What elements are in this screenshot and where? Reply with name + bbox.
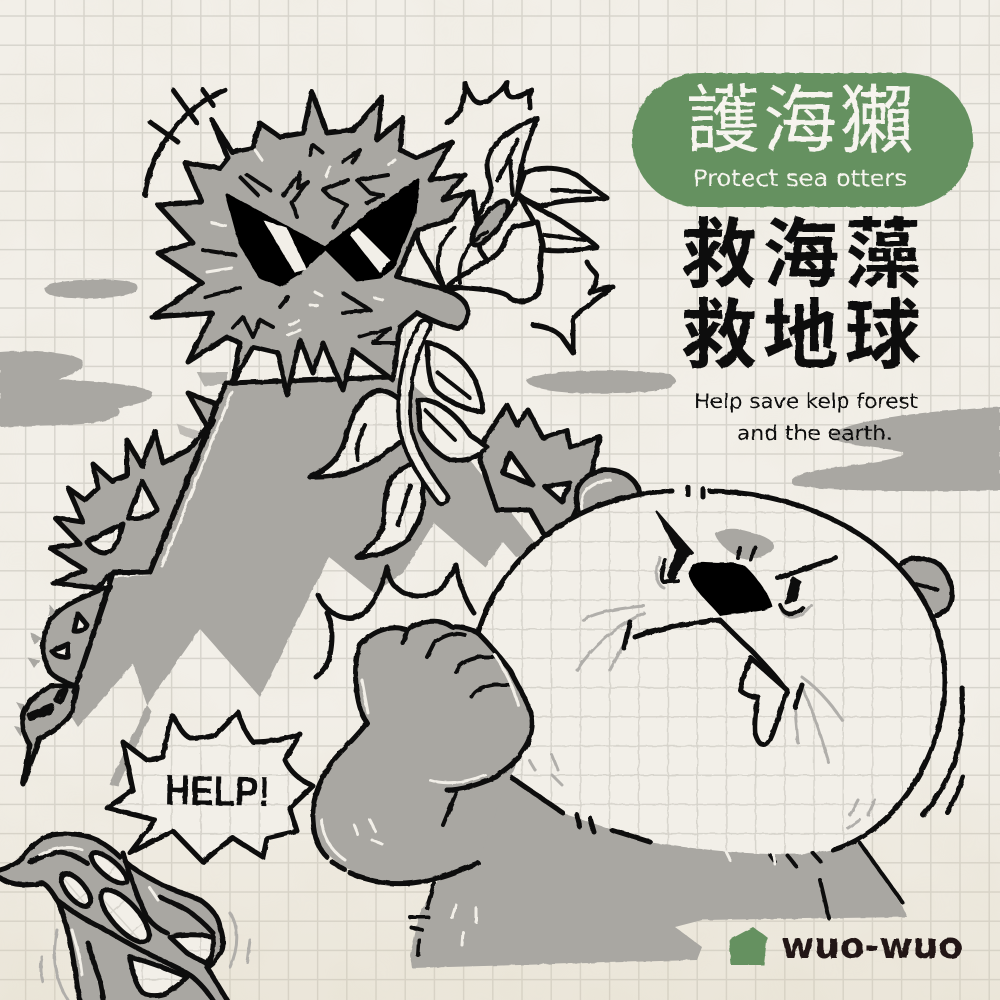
english subtitle bbox=[694, 389, 918, 445]
drifting kelp bottom left bbox=[0, 834, 227, 1000]
headline save kelp save earth bbox=[681, 213, 921, 379]
title pill: 護海獺 bbox=[686, 79, 914, 162]
sunglasses bbox=[227, 180, 418, 285]
mouth bbox=[635, 620, 787, 692]
headline save kelp save earth: 救海藻 bbox=[681, 213, 921, 298]
logo wuo-wuo: wuo-wuo bbox=[781, 926, 963, 967]
nose bbox=[688, 562, 773, 616]
otter near ear bbox=[898, 558, 952, 615]
english subtitle: and the earth. bbox=[737, 421, 893, 445]
tongue bbox=[740, 658, 787, 745]
otter far ear bbox=[576, 470, 640, 524]
otter body bbox=[410, 773, 907, 968]
grey background clouds bbox=[0, 279, 1000, 491]
spark lines top left bbox=[145, 90, 225, 195]
anger lines left of otter bbox=[316, 565, 474, 677]
right eye and brow bbox=[778, 558, 836, 578]
main sea urchin with sunglasses bbox=[152, 92, 470, 395]
forehead smudge bbox=[715, 529, 773, 559]
slim urchin at slope foot bbox=[22, 686, 77, 784]
whiskers bbox=[577, 606, 842, 763]
kelp upper leaves bbox=[417, 118, 607, 301]
help speech bubble: HELP! bbox=[165, 766, 270, 815]
title pill bbox=[632, 73, 973, 207]
grey motion lines near drifting kelp bbox=[41, 913, 250, 1000]
english subtitle: Help save kelp forest bbox=[694, 389, 918, 413]
round urchin left on slope bbox=[14, 586, 110, 736]
otter motion lines bbox=[923, 688, 963, 815]
spark lines top right bbox=[447, 82, 532, 123]
otter fist and arm bbox=[313, 621, 903, 955]
small urchin right, behind otter bbox=[480, 405, 600, 545]
mountain-shaped urchin barren shadow bbox=[70, 377, 542, 786]
spiky urchin left on slope bbox=[50, 393, 216, 588]
otter head bbox=[478, 487, 945, 866]
urchin spine marks bbox=[203, 145, 397, 343]
spark lines right of kelp bbox=[533, 262, 613, 353]
title pill: Protect sea otters bbox=[693, 166, 907, 192]
kelp stem and lower leaves bbox=[310, 326, 487, 557]
headline save kelp save earth: 救地球 bbox=[681, 294, 921, 379]
help speech bubble bbox=[107, 712, 313, 862]
left eye and brow bbox=[657, 558, 664, 588]
slope outline bbox=[74, 383, 232, 692]
otter face bbox=[577, 512, 842, 763]
